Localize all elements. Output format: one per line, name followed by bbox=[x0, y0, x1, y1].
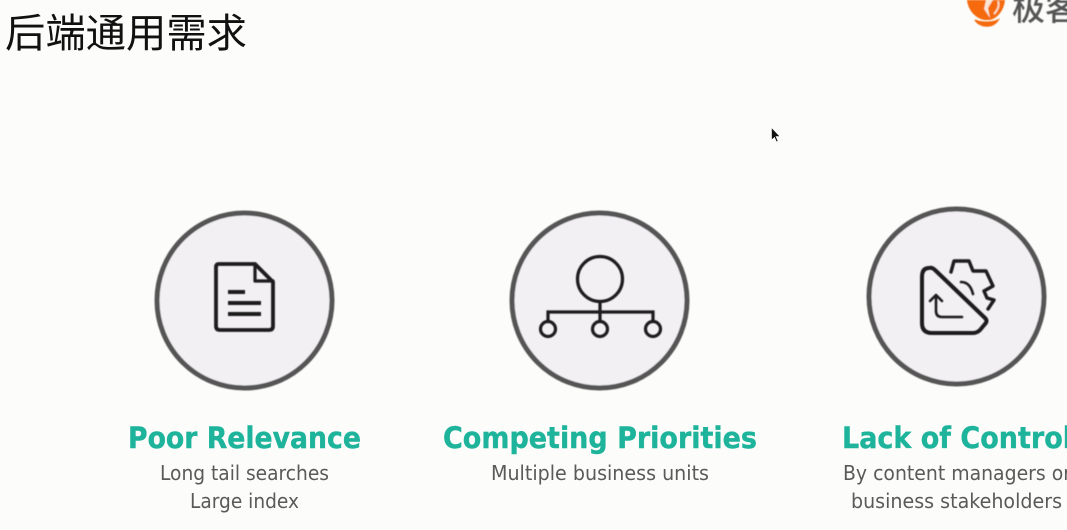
logo bbox=[967, 0, 1067, 27]
title: 后端通用需求 bbox=[5, 12, 247, 56]
panel: lack of control bbox=[842, 209, 1067, 513]
panel: competing priorities bbox=[443, 213, 757, 485]
heading: competing priorities: Competing Priorities bbox=[443, 421, 757, 455]
icon circle: poor relevance bbox=[157, 213, 332, 388]
description: poor relevance bbox=[160, 461, 329, 513]
description: lack of control bbox=[843, 461, 1067, 513]
icon: hierarchy bbox=[540, 256, 660, 336]
icon circle: lack of control bbox=[869, 209, 1044, 384]
cursor bbox=[772, 128, 780, 142]
panel: poor relevance bbox=[128, 213, 361, 513]
icon: triangle ruler and gear bbox=[922, 261, 994, 333]
icon: document bbox=[216, 264, 273, 330]
description: lack of control: business stakeholders bbox=[851, 489, 1062, 513]
description: poor relevance: Long tail searches bbox=[160, 461, 329, 485]
description: competing priorities: Multiple business units bbox=[491, 461, 709, 485]
heading: poor relevance: Poor Relevance bbox=[128, 421, 361, 455]
description: poor relevance: Large index bbox=[190, 489, 299, 513]
icon circle: competing priorities bbox=[512, 213, 687, 388]
